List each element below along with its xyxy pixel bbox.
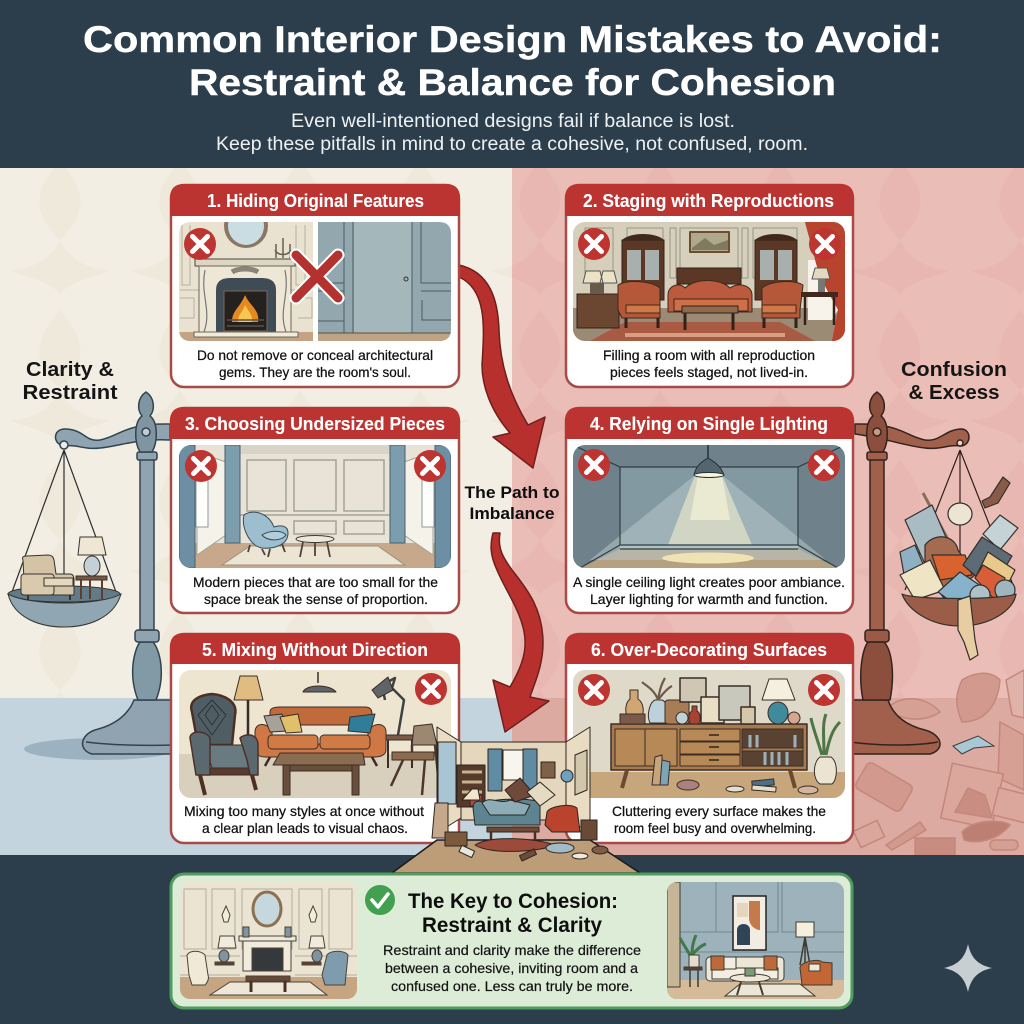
illustration: mixed furniture: [179, 670, 451, 798]
icon: large red cross: [296, 255, 338, 298]
caption 3: Modern pieces that are too small for the: [193, 574, 438, 590]
subtitle: Even well-intentioned designs fail if balance is lost.: [291, 111, 735, 132]
header bar 2: [565, 184, 854, 216]
panel: 3 choosing undersized pieces: [170, 407, 460, 613]
subtitle: [216, 111, 808, 155]
left balance scale: [24, 392, 176, 760]
background: left damask pattern: [0, 168, 512, 698]
caption 4: A single ceiling light creates poor ambiance.: [573, 574, 845, 590]
caption 5: [184, 803, 424, 836]
icon: large red cross fill: [296, 255, 338, 298]
right side label: [901, 359, 1007, 404]
body text: key to cohesion: confused one. Less can truly be more.: [391, 978, 633, 994]
heading 4: 4. Relying on Single Lighting: [590, 413, 828, 434]
left pan with chair and lamp: [8, 537, 121, 627]
central label: the path to imbalance: Imbalance: [470, 505, 554, 523]
caption 4: [573, 574, 845, 607]
panel: 1 hiding original features: [170, 184, 460, 387]
caption 3: space break the sense of proportion.: [204, 591, 428, 607]
header bar 6: [565, 633, 854, 664]
ghosted clutter on right floor: [853, 670, 1024, 855]
icon: x badge: [414, 450, 446, 482]
icon: x badge: [809, 228, 841, 260]
illustration: single ceiling light room: [573, 445, 845, 568]
central label: the path to imbalance: [464, 484, 560, 523]
panel: key to cohesion: [171, 874, 852, 1008]
caption 4: Layer lighting for warmth and function.: [590, 591, 828, 607]
right pan heap of clutter: [900, 477, 1018, 660]
illustration: reproduction room: [573, 222, 845, 341]
illustration: painted-over wall: [318, 222, 451, 341]
icon: x badge: [185, 450, 217, 482]
central cluttered room miniature: [392, 727, 640, 873]
header band: [0, 0, 1024, 168]
heading 2: 2. Staging with Reproductions: [583, 190, 834, 211]
illustration: cohesive modern room: [667, 882, 844, 999]
icon: x badge: [808, 449, 840, 481]
icon: x badge: [808, 674, 840, 706]
caption 5: Mixing too many styles at once without: [184, 803, 424, 819]
panel: 6 over-decorating surfaces: [565, 633, 854, 843]
header bar 5: [170, 633, 460, 664]
panel: 2 staging with reproductions: [565, 184, 854, 387]
icon: sparkle watermark: [944, 944, 992, 992]
background: right damask pattern: [512, 168, 1024, 698]
right balance scale: [850, 392, 969, 754]
arrow: path to imbalance, second segment: [491, 533, 549, 732]
small blue cloth on floor: [953, 736, 994, 754]
heading: key to cohesion: [408, 890, 618, 937]
caption 2: Filling a room with all reproduction: [603, 347, 815, 363]
icon: x badge: [415, 673, 447, 705]
heading 3: 3. Choosing Undersized Pieces: [185, 413, 445, 434]
caption 1: [197, 347, 433, 380]
floor: left: [0, 698, 512, 855]
body text: key to cohesion: [383, 942, 641, 994]
caption 5: a clear plan leads to visual chaos.: [202, 820, 408, 836]
illustration: small furniture in big room: [179, 445, 451, 568]
illustration: cluttered sideboard: [573, 670, 845, 798]
icon: x badge: [184, 228, 216, 260]
header bar 3: [170, 407, 460, 439]
background: right excess half: [512, 168, 1024, 698]
floor: right: [512, 698, 1024, 855]
heading 1: 1. Hiding Original Features: [207, 190, 424, 211]
illustration: cohesive traditional room: [180, 882, 357, 999]
caption 6: room feel busy and overwhelming.: [614, 820, 816, 836]
left side label: Clarity &: [26, 359, 114, 381]
left side label: Restraint: [22, 382, 118, 404]
header bar 1: [170, 184, 460, 216]
right pan strings: [905, 450, 1015, 590]
panel: 4 relying on single lighting: [565, 407, 854, 613]
icon: x badge: [578, 674, 610, 706]
caption 2: [603, 347, 815, 380]
caption 3: [193, 574, 438, 607]
subtitle: Keep these pitfalls in mind to create a cohesive, not confused, room.: [216, 134, 808, 155]
background: left calm half: [0, 168, 512, 698]
illustration: fireplace revealed: [179, 222, 313, 341]
right side label: & Excess: [908, 382, 1000, 404]
title: Restraint & Balance for Cohesion: [189, 62, 836, 103]
arrow: path to imbalance, first segment: [459, 265, 545, 468]
caption 1: gems. They are the room's soul.: [219, 364, 411, 380]
footer band: [0, 855, 1024, 1024]
right side label: Confusion: [901, 359, 1007, 381]
icon: green check: [365, 885, 395, 915]
central label: the path to imbalance: The Path to: [464, 484, 560, 502]
panel: 5 mixing without direction: [170, 633, 460, 843]
heading: key to cohesion: Restraint & Clarity: [422, 914, 602, 937]
left pan strings: [12, 450, 116, 592]
icon: x badge: [578, 228, 610, 260]
caption 2: pieces feels staged, not lived-in.: [610, 364, 808, 380]
body text: key to cohesion: between a cohesive, inviting room and a: [385, 960, 638, 976]
caption 1: Do not remove or conceal architectural: [197, 347, 433, 363]
icon: x badge: [578, 449, 610, 481]
caption 6: Cluttering every surface makes the: [612, 803, 826, 819]
heading 6: 6. Over-Decorating Surfaces: [591, 639, 827, 660]
title: Common Interior Design Mistakes to Avoid:: [83, 19, 942, 60]
header bar 4: [565, 407, 854, 439]
body text: key to cohesion: Restraint and clarity make the difference: [383, 942, 641, 958]
heading 5: 5. Mixing Without Direction: [202, 639, 428, 660]
title: [83, 19, 942, 103]
heading: key to cohesion: The Key to Cohesion:: [408, 890, 618, 913]
caption 6: [612, 803, 826, 836]
left side label: [22, 359, 118, 404]
